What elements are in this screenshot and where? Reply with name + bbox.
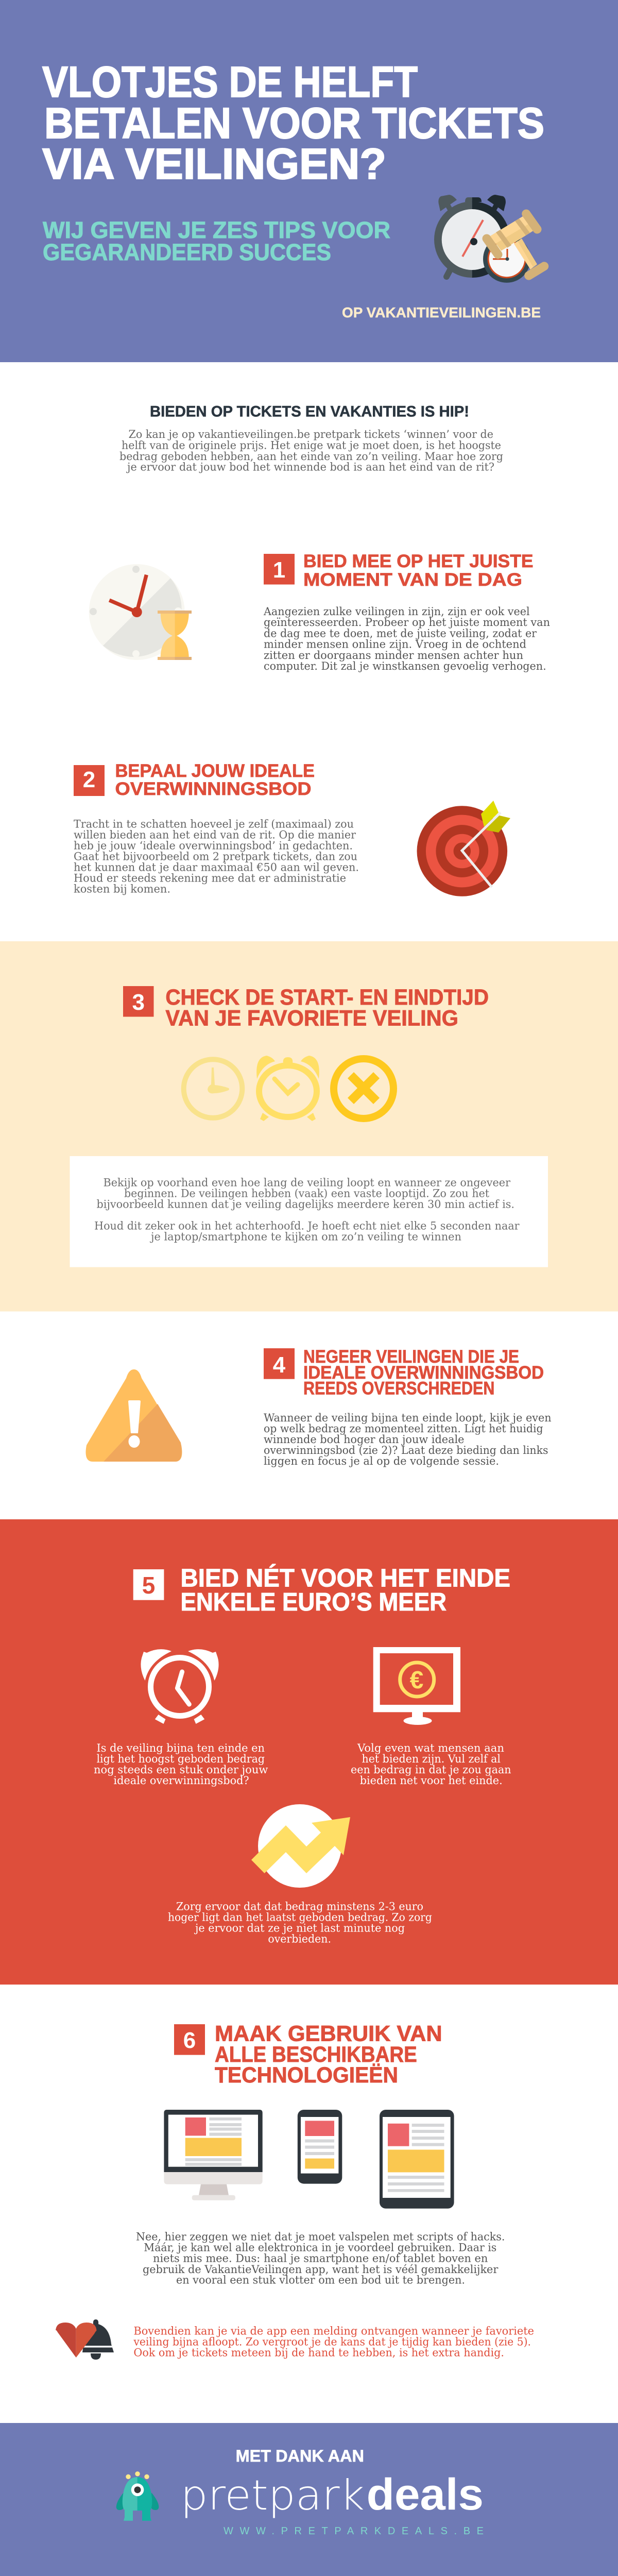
callout: app notification xyxy=(133,2325,534,2360)
website url: WWW.PRETPARKDEALS.BE xyxy=(224,2526,484,2537)
text: tip 1: Aangezien zulke veilingen in zijn, zijn er ook veel xyxy=(263,605,530,618)
heading: tip 2: OVERWINNINGSBOD xyxy=(115,779,311,799)
text: tip 4: winnende bod hoger dan jouw ideale xyxy=(264,1433,465,1446)
heading: tip 3 xyxy=(165,985,489,1031)
panel: tip 4 xyxy=(85,1347,552,1468)
heading: tip 3: CHECK DE START- EN EINDTIJD xyxy=(165,985,489,1010)
text: tip 2: Tracht in te schatten hoeveel je zelf (maximaal) zou xyxy=(74,818,354,831)
text: tip 4 xyxy=(264,1412,552,1468)
callout: app notification: veiling bijna afloopt. Zo vergroot je de kans dat je tijdig kan bieden (zie 5). xyxy=(133,2336,531,2349)
icon: rising arrow xyxy=(251,1804,350,1888)
text: column left: ligt het hoogst geboden bedrag xyxy=(97,1753,265,1766)
text: tip 6: niets mis mee. Dus: haal je smartphone en/of tablet boven en xyxy=(153,2252,488,2265)
text: tip 1: geïnteresseerden. Probeer op het juiste moment van xyxy=(264,616,550,629)
heading: tip 1 xyxy=(303,551,534,590)
number badge 6: 6 xyxy=(183,2028,196,2053)
heading: tip 3: VAN JE FAVORIETE VEILING xyxy=(165,1006,458,1031)
panel: tip 2 xyxy=(74,761,510,896)
panel: introduction xyxy=(119,403,503,474)
heading: tip 1: MOMENT VAN DE DAG xyxy=(303,570,522,590)
heading: tip 4: NEGEER VEILINGEN DIE JE xyxy=(303,1347,519,1367)
icon: target with arrow xyxy=(417,801,510,896)
title: BETALEN VOOR TICKETS xyxy=(44,99,544,147)
text: center: overbieden. xyxy=(268,1933,331,1946)
text: tip 1: minder mensen online zijn. Vroeg in de ochtend xyxy=(264,638,526,651)
text: column right: Volg even wat mensen aan xyxy=(357,1742,504,1755)
intro text: helft van de originele prijs. Het enige wat je moet doen, is het hoogste xyxy=(122,439,501,452)
text box: tip 3: Houd dit zeker ook in het achterhoofd. Je hoeft echt niet elke 5 seconden naar xyxy=(94,1219,520,1232)
number badge 1: 1 xyxy=(273,557,285,583)
logo wordmark: pretpark xyxy=(180,2471,365,2519)
source label: OP VAKANTIEVEILINGEN.BE xyxy=(342,304,541,320)
icon: clock and hourglass xyxy=(89,564,192,660)
icon: alarm clock, timer and gavel xyxy=(434,195,544,283)
text: tip 6 xyxy=(136,2231,505,2287)
callout: app notification: Bovendien kan je via de app een melding ontvangen wanneer je favoriete xyxy=(133,2325,534,2338)
number badge 5 xyxy=(133,1569,164,1600)
title: VLOTJES DE HELFT xyxy=(42,58,418,106)
text box: tip 3 xyxy=(70,1156,548,1267)
number badge 3: 3 xyxy=(132,990,145,1015)
text box: tip 3: bijvoorbeeld kunnen dat je veiling dagelijks meerdere keren 30 min actief is. xyxy=(97,1198,514,1211)
number badge 3 xyxy=(123,986,153,1017)
text: column left xyxy=(94,1742,268,1787)
text: tip 2: het kunnen dat je daar maximaal €50 aan wil geven. xyxy=(74,861,359,874)
text box: tip 3: beginnen. De veilingen hebben (vaak) een vaste looptijd. Zo zou het xyxy=(124,1187,489,1200)
intro text xyxy=(119,428,503,474)
icon: heart and bell xyxy=(56,2319,114,2360)
text: tip 2: willen bieden aan het eind van de rit. Op die manier xyxy=(74,829,356,842)
heading: tip 5 xyxy=(180,1564,510,1616)
logo wordmark xyxy=(180,2470,484,2519)
icon: tablet xyxy=(380,2110,454,2209)
text: tip 2: Gaat het bijvoorbeeld om 2 pretpark tickets, dan zou xyxy=(74,851,357,863)
text: tip 6: Máár, je kan wel alle elektronica in je voordeel gebruiken. Daar is xyxy=(144,2242,496,2255)
text: center: hoger ligt dan het laatst geboden bedrag. Zo zorg xyxy=(168,1911,432,1924)
text: tip 2 xyxy=(74,818,359,896)
panel: footer xyxy=(0,2423,618,2576)
number badge 4: 4 xyxy=(273,1352,286,1378)
heading: tip 4 xyxy=(303,1347,544,1399)
panel: header xyxy=(0,0,618,362)
intro text: bedrag geboden hebben, aan het einde van zo’n veiling. Maar hoe zorg xyxy=(119,450,503,463)
heading: tip 1: BIED MEE OP HET JUISTE xyxy=(303,551,534,571)
text: tip 2: heb je jouw ‘ideale overwinningsbod’ in gedachten. xyxy=(74,840,353,853)
intro text: je ervoor dat jouw bod het winnende bod is aan het eind van de rit? xyxy=(126,461,494,474)
subtitle: WIJ GEVEN JE ZES TIPS VOOR xyxy=(43,217,390,243)
text: center: je ervoor dat ze je niet last minute nog xyxy=(194,1922,405,1935)
title: VIA VEILINGEN? xyxy=(42,140,386,188)
panel: tip 1 xyxy=(89,551,550,673)
icon: monitor with euro xyxy=(373,1647,460,1725)
text: column left: Is de veiling bijna ten einde en xyxy=(97,1742,265,1755)
icon: monster mascot xyxy=(116,2471,159,2521)
text: tip 1 xyxy=(263,605,550,673)
text: tip 4: overwinningsbod (zie 2)? Laat deze bieding dan links xyxy=(264,1444,548,1457)
text: tip 1: de dag mee te doen, met de juiste veiling, zodat er xyxy=(264,628,537,640)
heading: tip 4: REEDS OVERSCHREDEN xyxy=(303,1379,494,1399)
icon: desktop monitor xyxy=(164,2110,263,2200)
number badge 5: 5 xyxy=(142,1572,155,1599)
heading: tip 5: BIED NÉT VOOR HET EINDE xyxy=(180,1564,510,1592)
text: column left: ideale overwinningsbod? xyxy=(113,1774,249,1787)
text: column right: het bieden zijn. Vul zelf al xyxy=(362,1753,501,1766)
text: column right xyxy=(351,1742,511,1787)
text: tip 6: gebruik de VakantieVeilingen app, want het is véél gemakkelijker xyxy=(143,2263,499,2276)
icon: monitor with euro: € xyxy=(410,1667,423,1694)
logo wordmark: deals xyxy=(367,2470,484,2519)
panel: tip 6 xyxy=(56,2021,534,2360)
text: column left: nog steeds een stuk onder jouw xyxy=(94,1764,268,1776)
heading: tip 2: BEPAAL JOUW IDEALE xyxy=(115,761,315,781)
number badge 4 xyxy=(264,1348,295,1379)
text: center: Zorg ervoor dat dat bedrag minstens 2-3 euro xyxy=(176,1901,423,1913)
icon: alarm clock xyxy=(256,1056,319,1121)
icon: alarm clock xyxy=(141,1649,219,1724)
text: tip 1: computer. Dit zal je winstkansen gevoelig verhogen. xyxy=(264,660,546,673)
title xyxy=(42,58,544,188)
panel: tip 5 xyxy=(0,1519,618,1985)
heading: tip 6: TECHNOLOGIEËN xyxy=(215,2063,398,2088)
text: tip 2: kosten bij komen. xyxy=(74,883,170,896)
heading: tip 5: ENKELE EURO’S MEER xyxy=(180,1588,447,1616)
text: tip 4: liggen en focus je al op de volgende sessie. xyxy=(264,1455,499,1468)
text: column right: bieden net voor het einde. xyxy=(360,1774,503,1787)
text box: tip 3: Bekijk op voorhand even hoe lang de veiling loopt en wanneer ze ongeveer xyxy=(103,1177,511,1189)
text: tip 2: Houd er steeds rekening mee dat er administratie xyxy=(74,872,346,885)
subtitle: GEGARANDEERD SUCCES xyxy=(43,239,331,265)
heading: tip 6: ALLE BESCHIKBARE xyxy=(215,2042,417,2067)
subtitle xyxy=(43,217,390,265)
callout: app notification: Ook om je tickets meteen bij de hand te hebben, is het extra handig. xyxy=(133,2346,504,2360)
heading: tip 4: IDEALE OVERWINNINGSBOD xyxy=(303,1363,544,1383)
number badge 1 xyxy=(264,554,295,584)
number badge 2 xyxy=(74,765,105,796)
icon: clock xyxy=(184,1059,242,1118)
heading: tip 6: MAAK GEBRUIK VAN xyxy=(215,2021,442,2046)
number badge 2: 2 xyxy=(83,767,95,792)
text: tip 1: zitten er doorgaans minder mensen achter hun xyxy=(264,649,523,662)
text: tip 6: Nee, hier zeggen we niet dat je moet valspelen met scripts of hacks. xyxy=(136,2231,505,2244)
intro text: Zo kan je op vakantieveilingen.be pretpark tickets ‘winnen’ voor de xyxy=(129,428,493,441)
heading: tip 2 xyxy=(115,761,315,799)
text: tip 6: en vooral een stuk vlotter om een bod uit te brengen. xyxy=(176,2274,465,2287)
credits heading: MET DANK AAN xyxy=(236,2447,364,2465)
icon: warning triangle xyxy=(85,1369,182,1462)
panel: tip 3 xyxy=(0,941,618,1312)
text: column right: een bedrag in dat je zou gaan xyxy=(351,1764,511,1776)
text: tip 4: Wanneer de veiling bijna ten einde loopt, kijk je even xyxy=(264,1412,552,1425)
text: tip 4: op welk bedrag ze momenteel zitten. Ligt het huidig xyxy=(264,1422,543,1435)
intro heading: BIEDEN OP TICKETS EN VAKANTIES IS HIP! xyxy=(150,403,469,420)
text: center xyxy=(168,1901,432,1946)
heading: tip 6 xyxy=(215,2021,442,2088)
icon: smartphone xyxy=(298,2110,342,2184)
icon: cross in circle xyxy=(334,1059,393,1118)
number badge 6 xyxy=(174,2024,205,2055)
text box: tip 3: je laptop/smartphone te kijken om zo’n veiling te winnen xyxy=(149,1230,461,1243)
